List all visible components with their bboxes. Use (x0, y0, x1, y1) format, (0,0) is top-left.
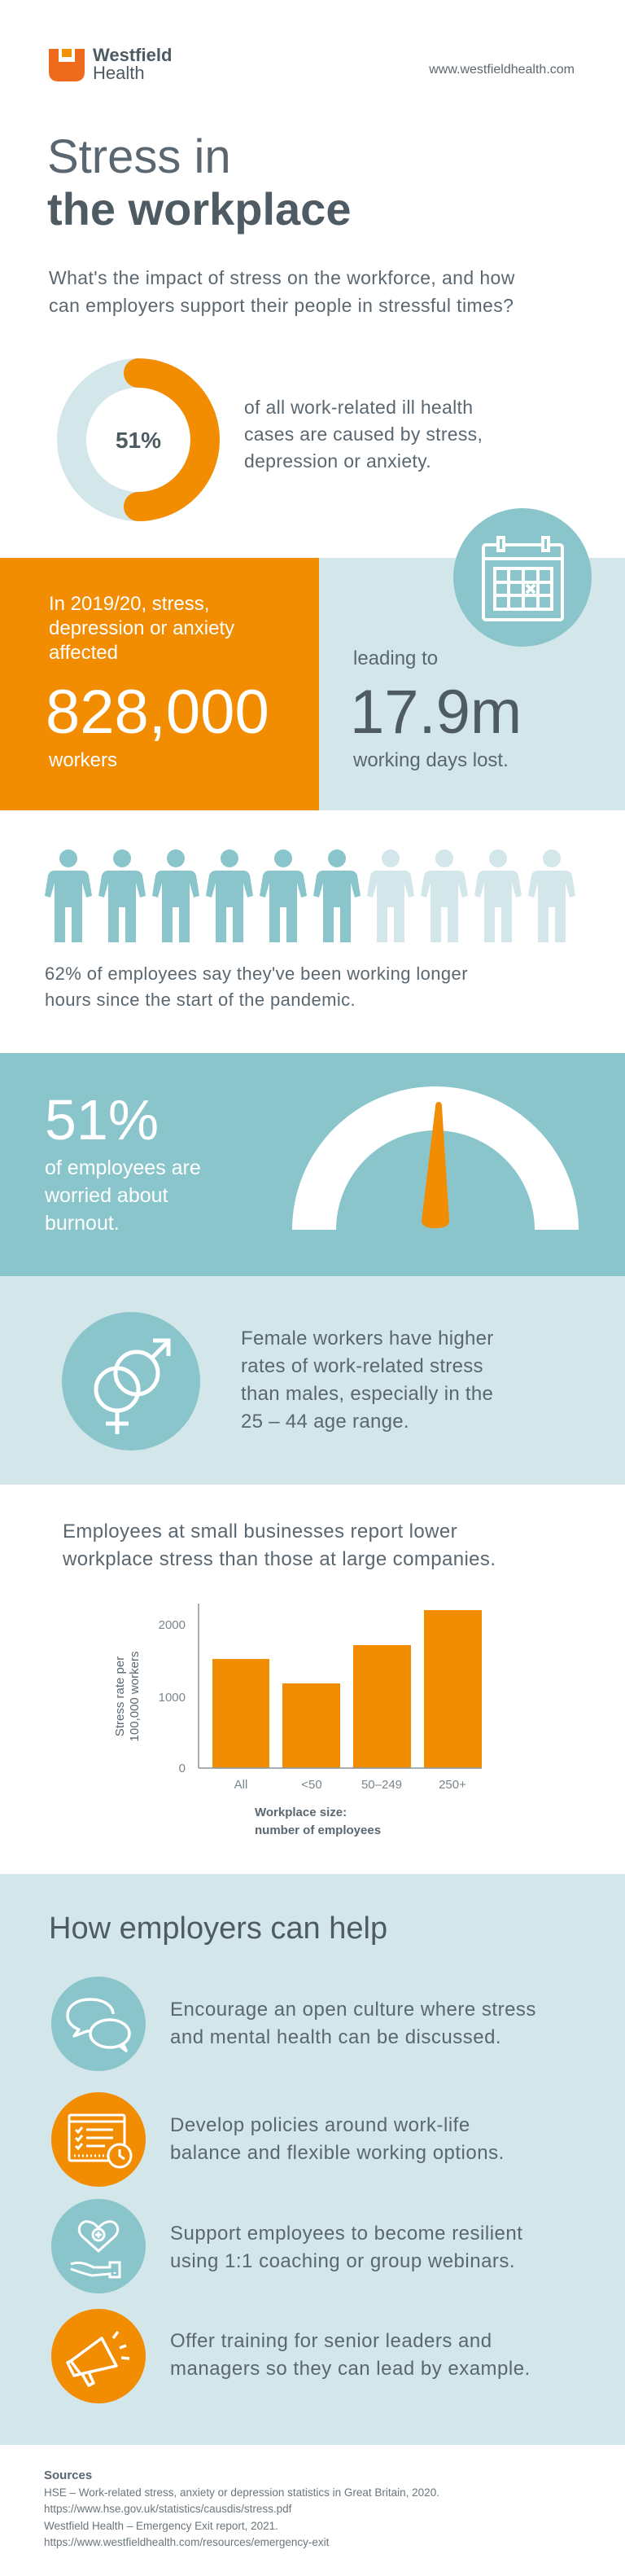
panel: burnout: of employees are (45, 1156, 201, 1179)
subtitle: can employers support their people in stressful times? (49, 295, 514, 316)
chart heading text (63, 1521, 496, 1570)
panel: how employers can help: and mental health can be discussed. (170, 2026, 501, 2048)
panel: how employers can help: Offer training for senior leaders and (170, 2330, 492, 2352)
panel: orange 828,000 (0, 558, 319, 810)
icon: heart in hand (51, 2199, 146, 2293)
panel: burnout: worried about (45, 1184, 168, 1207)
panel: how employers can help: Encourage an open culture where stress (170, 1999, 536, 2021)
panel: orange 828,000: depression or anxiety (49, 617, 234, 639)
panel: gender: Female workers have higher (241, 1327, 494, 1349)
gauge (292, 1086, 579, 1230)
panel: how employers can help: using 1:1 coaching or group webinars. (170, 2250, 515, 2272)
people text (45, 963, 468, 1010)
chart heading text: workplace stress than those at large companies. (63, 1548, 496, 1570)
donut text: depression or anxiety. (244, 450, 431, 472)
icon: chat bubbles (51, 1977, 146, 2071)
bar chart: Workplace size: (255, 1806, 347, 1819)
panel: how employers can help: balance and flexible working options. (170, 2142, 505, 2164)
icon: calendar (453, 508, 592, 647)
panel: days lost: leading to (353, 647, 438, 669)
bar chart: All (234, 1778, 247, 1792)
donut text: of all work-related ill health (244, 397, 473, 418)
bar chart: Stress rate per (113, 1657, 127, 1736)
panel: how employers can help (0, 1874, 625, 2445)
sources: https://www.westfieldhealth.com/resources/emergency-exit (44, 2536, 329, 2548)
donut text (244, 397, 483, 472)
logo (49, 45, 172, 83)
panel: gender: 25 – 44 age range. (241, 1411, 409, 1433)
people text: 62% of employees say they've been working longer (45, 963, 468, 984)
sources: Sources (44, 2468, 92, 2482)
logo: Westfield (93, 45, 172, 65)
subtitle (49, 267, 515, 316)
panel: orange 828,000: workers (49, 749, 117, 771)
url: www.westfieldhealth.com (429, 63, 575, 77)
subtitle: What's the impact of stress on the workforce, and how (49, 267, 515, 288)
panel: orange 828,000: 828,000 (46, 678, 269, 747)
panel: gender: rates of work-related stress (241, 1355, 483, 1377)
title: the workplace (47, 183, 351, 235)
sources: https://www.hse.gov.uk/statistics/causdis/stress.pdf (44, 2503, 291, 2515)
panel: days lost (319, 558, 625, 810)
people text: hours since the start of the pandemic. (45, 990, 356, 1010)
bar chart: 1000 (159, 1691, 186, 1705)
bar chart (113, 1604, 482, 1837)
icon: gender (62, 1312, 200, 1450)
bar chart: 50–249 (361, 1778, 402, 1792)
panel: days lost: 17.9m (350, 678, 522, 747)
donut text: cases are caused by stress, (244, 423, 483, 445)
donut chart 51% (57, 358, 220, 521)
panel: burnout: 51% (45, 1088, 159, 1152)
panel: days lost: working days lost. (353, 749, 509, 771)
panel: how employers can help: Develop policies around work-life (170, 2114, 470, 2136)
people pictogram (45, 849, 575, 942)
bar chart: 250+ (439, 1778, 466, 1792)
title: Stress in (47, 130, 231, 183)
sources: HSE – Work-related stress, anxiety or depression statistics in Great Britain, 2020. (44, 2486, 439, 2499)
icon: megaphone (51, 2309, 146, 2403)
panel: how employers can help: managers so they can lead by example. (170, 2358, 531, 2380)
sources (44, 2468, 439, 2548)
bar chart: 0 (179, 1762, 186, 1775)
panel: burnout: burnout. (45, 1212, 120, 1235)
icon: logo mark (49, 49, 85, 81)
icon: policy checklist (51, 2092, 146, 2187)
panel: orange 828,000: affected (49, 642, 118, 664)
panel: burnout (0, 1053, 625, 1276)
panel: how employers can help: Support employees to become resilient (170, 2223, 522, 2245)
title (47, 130, 351, 235)
heading: How employers can help (49, 1911, 387, 1946)
panel: gender (0, 1276, 625, 1485)
panel: gender: than males, especially in the (241, 1383, 493, 1405)
logo: Health (93, 63, 145, 83)
chart heading text: Employees at small businesses report lower (63, 1521, 457, 1543)
sources: Westfield Health – Emergency Exit report, 2021. (44, 2520, 278, 2531)
bar chart: 2000 (159, 1618, 186, 1632)
bar chart: number of employees (255, 1823, 381, 1837)
donut chart 51%: 51% (116, 428, 161, 453)
bar chart: <50 (301, 1778, 322, 1792)
bar chart: 100,000 workers (128, 1652, 142, 1741)
panel: orange 828,000: In 2019/20, stress, (49, 593, 209, 615)
